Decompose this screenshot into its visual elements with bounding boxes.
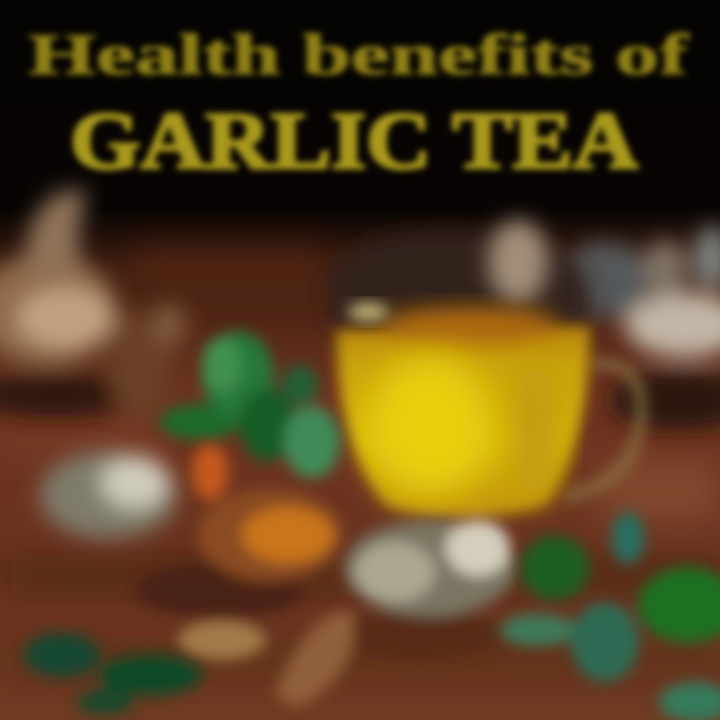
mug handle [565, 364, 641, 498]
green leaves: bottom right [500, 512, 720, 720]
garlic bulb: top left [0, 190, 186, 420]
garlic bulb: centre foreground [335, 520, 516, 659]
garlic bulbs: top right behind the glass [559, 226, 720, 430]
ginger slices: bottom [178, 610, 356, 708]
ginger and orange slices [135, 444, 342, 618]
glass rim [327, 231, 591, 330]
green leaves: bottom left [24, 633, 202, 714]
heading: Health benefits of: Health benefits of [28, 22, 689, 87]
green leaves: centre left [160, 331, 340, 478]
title [28, 22, 689, 186]
tea liquid [336, 326, 590, 518]
heading: GARLIC TEA: GARLIC TEA [70, 95, 638, 186]
glass of garlic tea [327, 220, 641, 518]
garlic bulb: left [40, 451, 176, 539]
